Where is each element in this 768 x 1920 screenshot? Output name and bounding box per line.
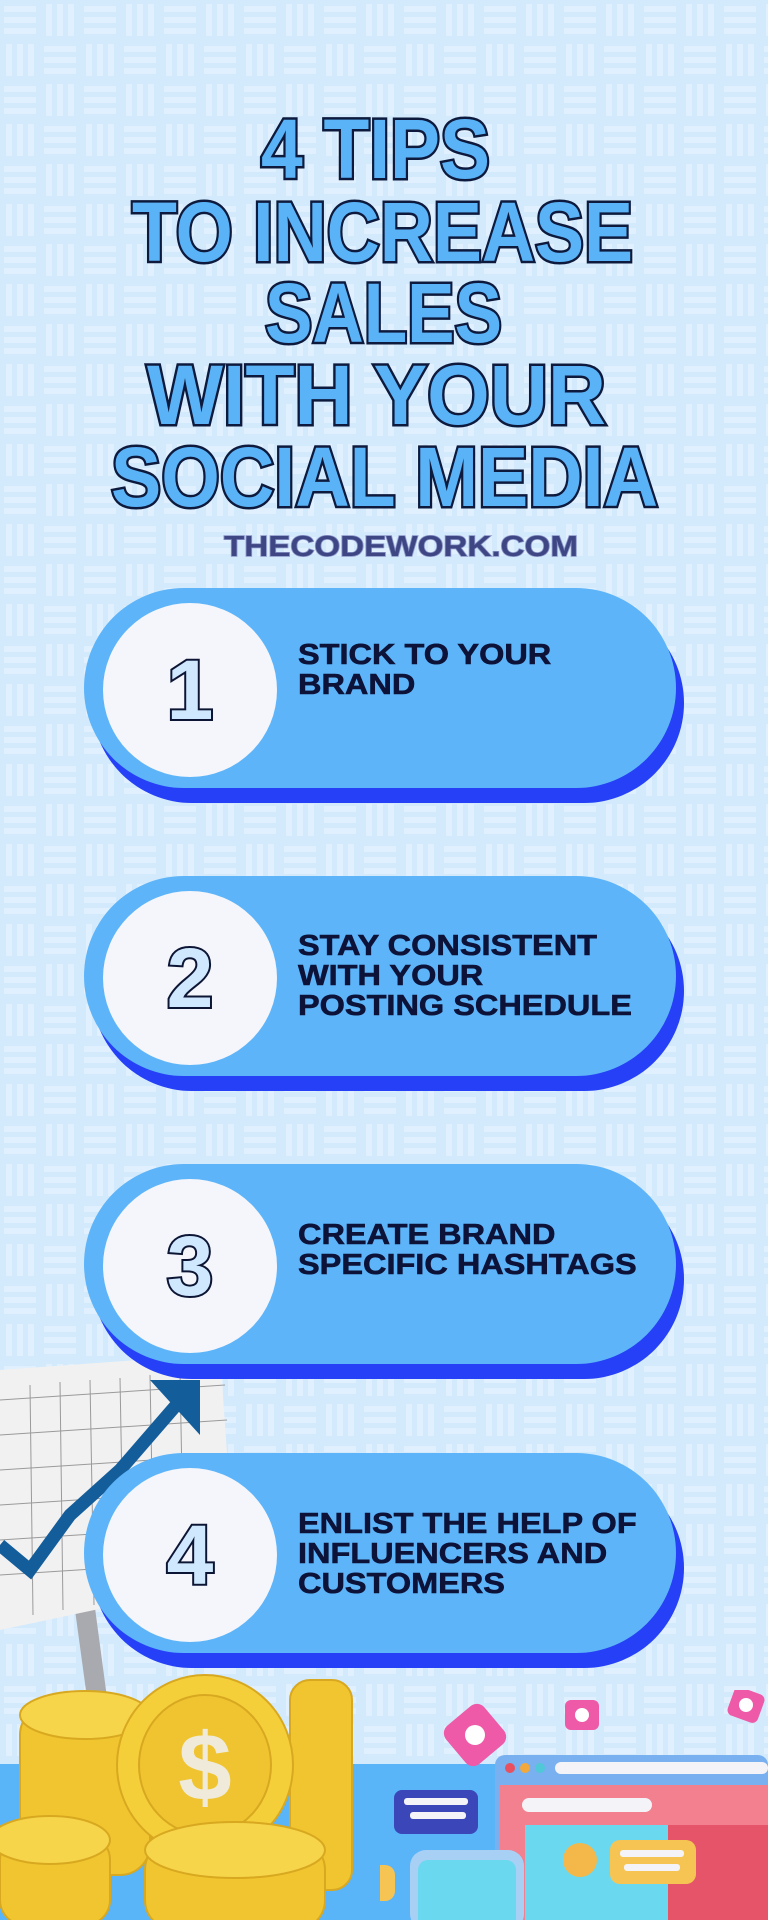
title: 4 TIPS bbox=[261, 102, 490, 196]
tip text 2: WITH YOUR bbox=[298, 960, 483, 992]
tip text 4: INFLUENCERS AND bbox=[298, 1538, 607, 1570]
pill: tip 4 bbox=[84, 1453, 684, 1668]
pill: tip 1 bbox=[84, 588, 684, 803]
tip text 3: CREATE BRAND bbox=[298, 1219, 555, 1251]
tip text 1: BRAND bbox=[298, 669, 415, 701]
coins bbox=[0, 1674, 353, 1920]
title: TO INCREASE bbox=[132, 185, 633, 279]
tip text 3: SPECIFIC HASHTAGS bbox=[298, 1249, 637, 1281]
title: SOCIAL MEDIA bbox=[111, 430, 658, 524]
title: WITH YOUR bbox=[147, 348, 606, 442]
tip text 2: STAY CONSISTENT bbox=[298, 930, 597, 962]
floor bbox=[0, 1764, 768, 1920]
tip text 4: CUSTOMERS bbox=[298, 1568, 505, 1600]
number 3: 3 bbox=[167, 1219, 213, 1313]
tip text 4: ENLIST THE HELP OF bbox=[298, 1508, 637, 1540]
number 2: 2 bbox=[167, 931, 213, 1025]
pill: tip 2 bbox=[84, 876, 684, 1091]
tip text 2 bbox=[298, 930, 632, 1022]
title bbox=[110, 102, 660, 524]
tip text 1: STICK TO YOUR bbox=[298, 639, 551, 671]
bottom illustration: chart board bbox=[0, 1360, 227, 1692]
title: SALES bbox=[265, 266, 502, 360]
subtitle: website: THECODEWORK.COM bbox=[224, 531, 578, 563]
tip text 1 bbox=[298, 639, 552, 701]
social media icons bbox=[380, 1690, 768, 1920]
tip text 2: POSTING SCHEDULE bbox=[298, 990, 632, 1022]
tip text 4 bbox=[298, 1508, 637, 1600]
tip text 3 bbox=[298, 1219, 637, 1281]
coins: $ bbox=[178, 1714, 232, 1821]
number 1: 1 bbox=[167, 643, 213, 737]
pill: tip 3 bbox=[84, 1164, 684, 1379]
number 4: 4 bbox=[167, 1508, 213, 1602]
